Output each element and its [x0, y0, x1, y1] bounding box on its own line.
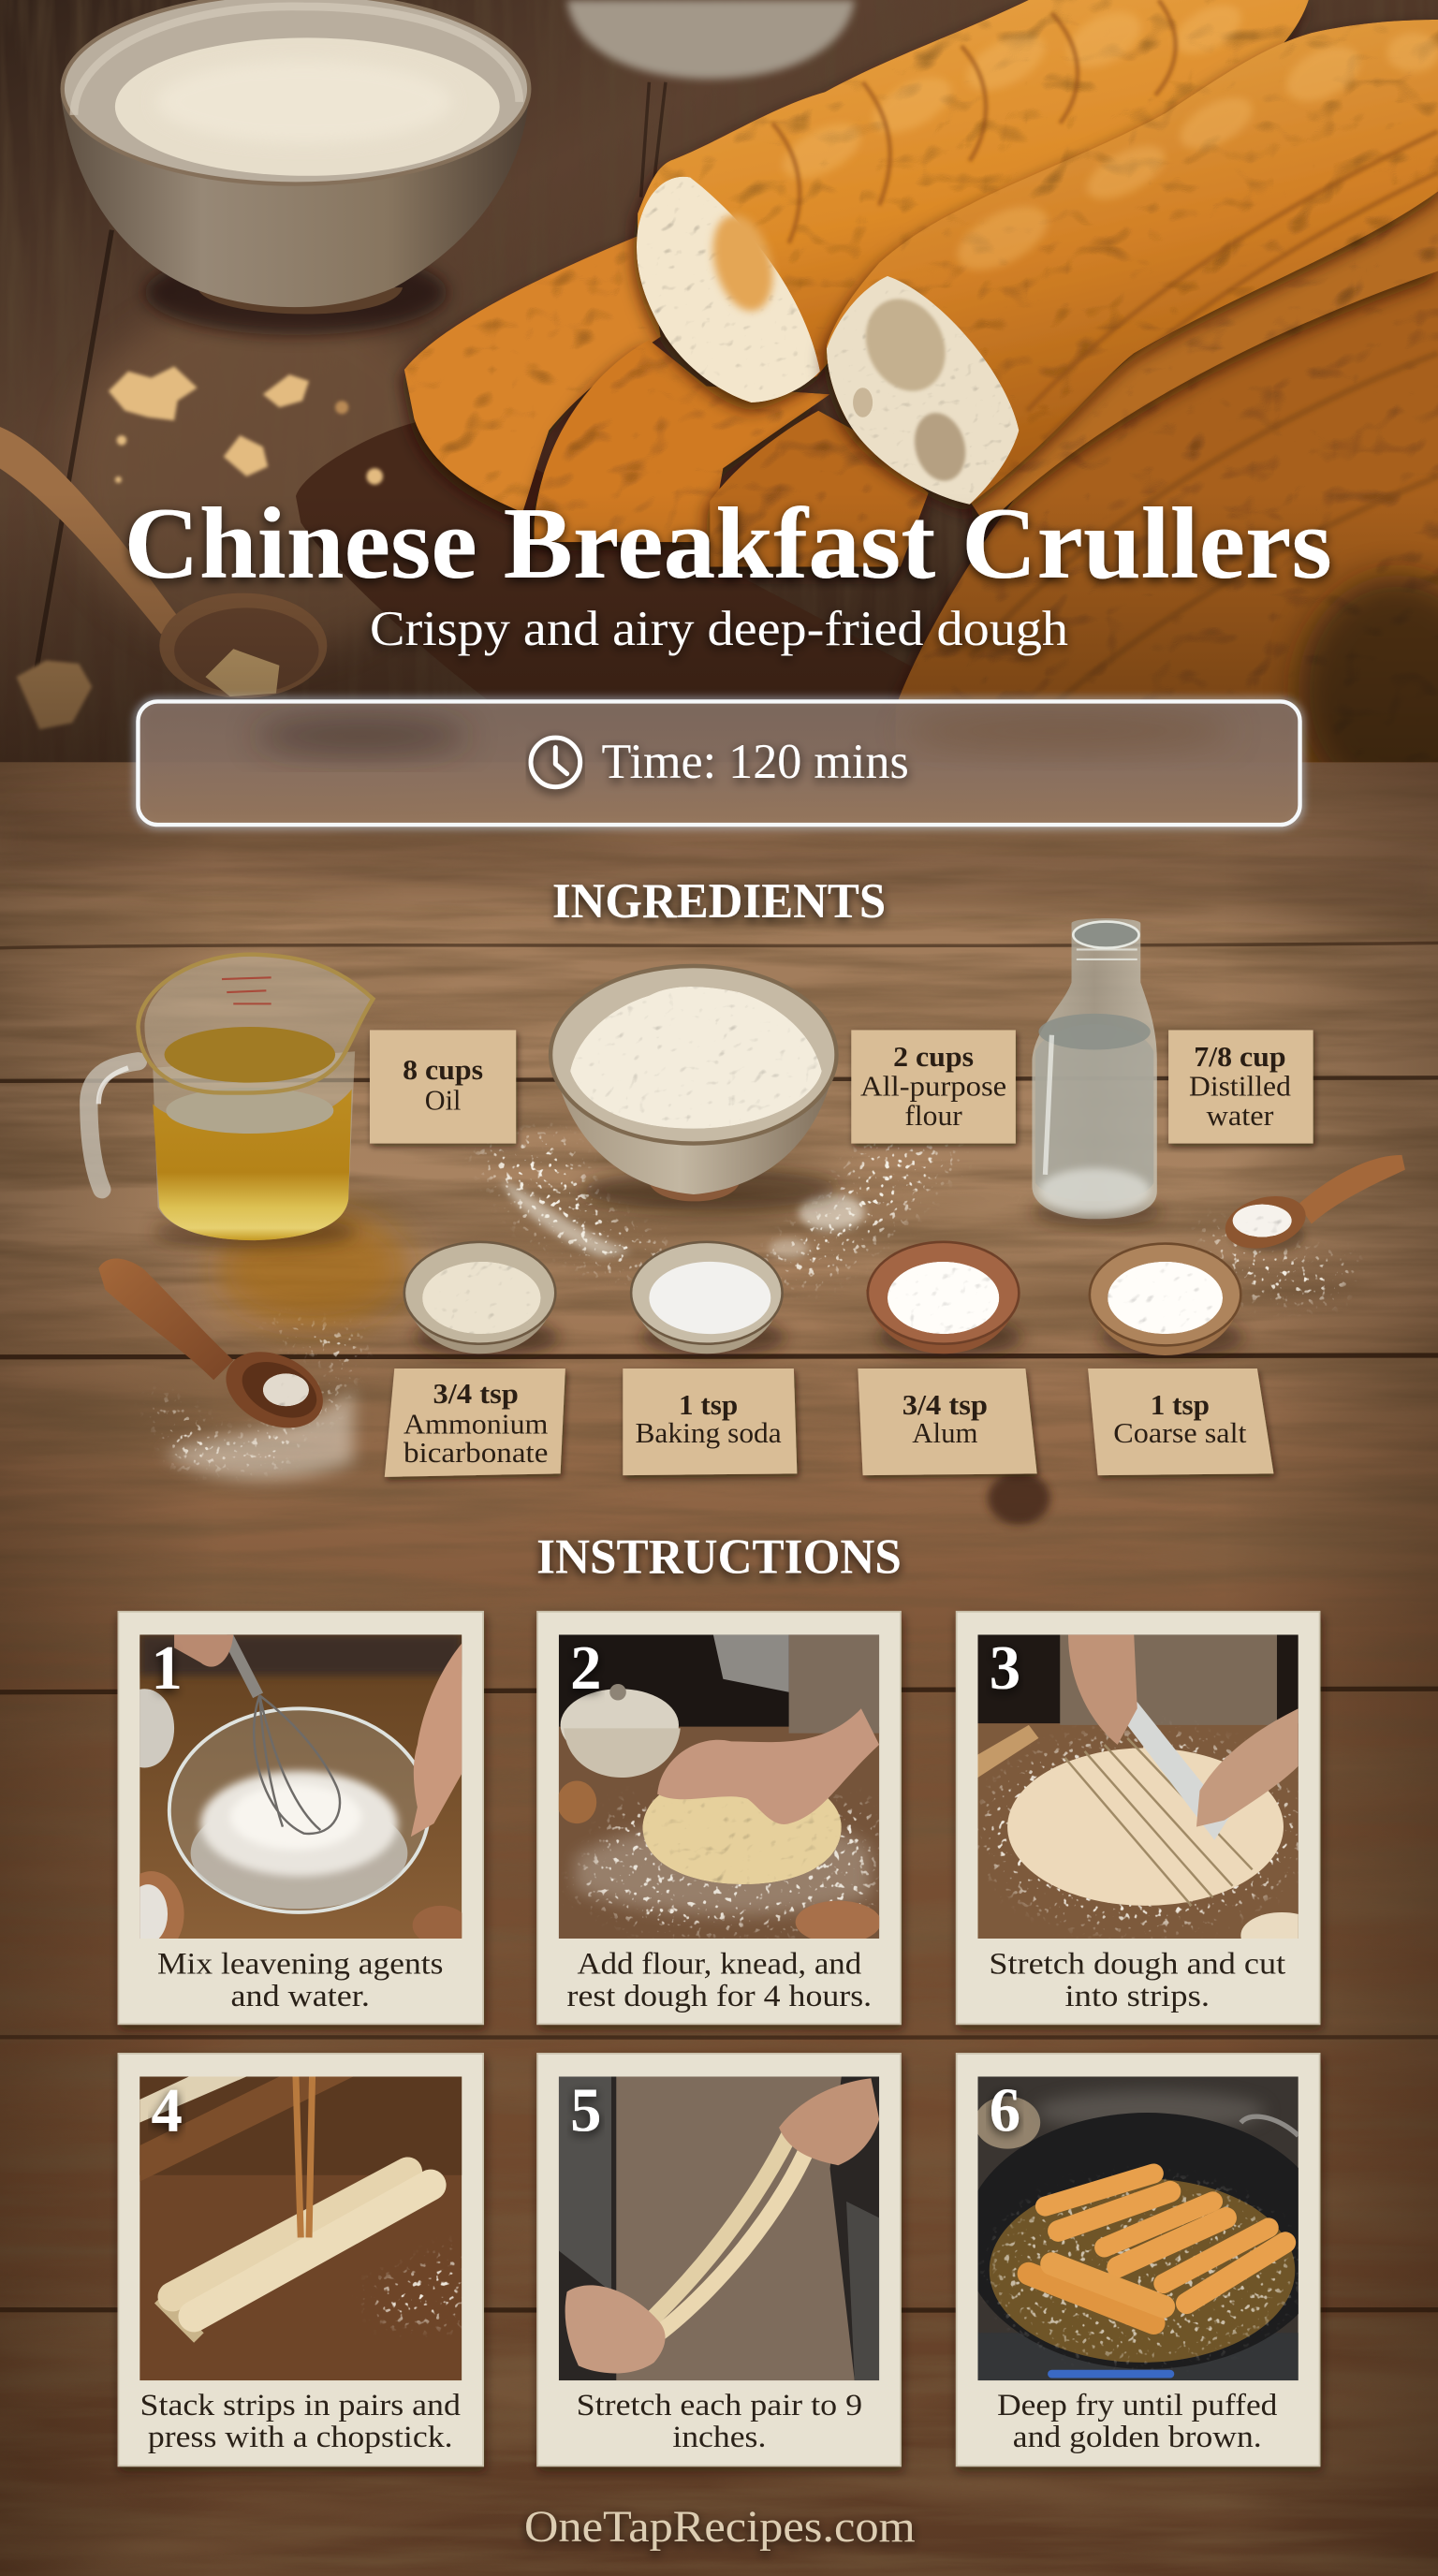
caption: Add flour, knead, and	[578, 1948, 861, 1982]
cup of soy milk	[61, 0, 531, 335]
label: oil: Oil	[425, 1085, 461, 1117]
time panel	[138, 701, 1300, 825]
caption: Mix leavening agents	[157, 1948, 443, 1982]
wood table background	[0, 762, 1438, 2576]
label: baking soda: Baking soda	[635, 1417, 782, 1449]
distant cup	[567, 0, 855, 79]
label: coarse salt: Coarse salt	[1113, 1417, 1247, 1449]
cruller left	[404, 233, 661, 513]
label: water: 7/8 cup	[1194, 1041, 1286, 1073]
label: flour	[851, 1030, 1016, 1144]
card: step 5	[537, 2054, 901, 2466]
flour bowl	[550, 966, 838, 1209]
heading: instructions: INSTRUCTIONS	[536, 1530, 902, 1585]
step number: 6	[990, 2076, 1020, 2144]
label: coarse salt	[1088, 1368, 1273, 1475]
bowl: baking soda	[631, 1242, 785, 1357]
footer: site name: OneTapRecipes.com	[524, 2503, 916, 2552]
label: water	[1168, 1030, 1313, 1144]
caption: press with a chopstick.	[148, 2421, 453, 2454]
spoon left with powder	[98, 1259, 361, 1480]
photo: kneading dough	[557, 1634, 881, 1943]
label: flour: flour	[904, 1100, 962, 1132]
caption	[140, 2389, 461, 2454]
caption	[567, 1948, 872, 2013]
caption: inches.	[672, 2421, 766, 2454]
label: alum	[858, 1368, 1037, 1475]
caption: Stretch each pair to 9	[577, 2389, 862, 2422]
measuring jug of oil	[89, 955, 373, 1249]
heading: ingredients: INGREDIENTS	[552, 874, 886, 929]
dark wooden tabletop	[0, 0, 1438, 762]
crumbs	[17, 366, 383, 729]
step number: 5	[570, 2076, 601, 2144]
label: oil: 8 cups	[403, 1054, 483, 1086]
bowl: coarse salt	[1090, 1244, 1244, 1357]
card: step 3	[957, 1612, 1323, 2024]
wooden spoon	[0, 424, 327, 698]
step number: 3	[990, 1634, 1020, 1703]
oil glow on table	[217, 1209, 407, 1327]
label: baking soda	[623, 1368, 797, 1475]
caption: Stack strips in pairs and	[140, 2389, 461, 2422]
photo: cutting dough strips	[977, 1634, 1323, 1958]
spoon right with salt	[1199, 1155, 1405, 1298]
photo: stretching dough pair	[559, 2076, 879, 2380]
label: ammonium bicarbonate: Ammonium	[404, 1408, 549, 1440]
photo: deep frying in wok	[963, 2076, 1331, 2380]
water bottle	[1032, 918, 1164, 1225]
label: flour: All-purpose	[860, 1071, 1006, 1103]
label: water: water	[1206, 1100, 1273, 1132]
cruller low	[710, 411, 929, 567]
icon: clock	[531, 738, 580, 787]
caption: Stretch dough and cut	[989, 1948, 1285, 1982]
step number: 2	[570, 1634, 601, 1703]
label: ammonium bicarbonate: bicarbonate	[404, 1437, 548, 1469]
label: alum: Alum	[912, 1417, 978, 1449]
card: step 4	[118, 2054, 483, 2466]
caption: into strips.	[1065, 1980, 1210, 2013]
title: Chinese Breakfast Crullers	[125, 487, 1332, 600]
lower darkening	[0, 493, 1438, 762]
lower dim cruller	[896, 255, 1438, 772]
card: step 2	[537, 1612, 901, 2024]
label: oil	[370, 1030, 516, 1144]
cruller back band	[970, 189, 1438, 526]
time label: Time: 120 mins	[601, 735, 909, 789]
caption	[997, 2389, 1277, 2454]
label: flour: 2 cups	[893, 1041, 974, 1073]
cutting board	[296, 423, 906, 699]
caption	[989, 1948, 1285, 2013]
caption: Deep fry until puffed	[997, 2389, 1277, 2422]
bowl: alum	[866, 1242, 1022, 1357]
caption	[157, 1948, 443, 2013]
panel: ingredients	[89, 918, 1405, 1480]
upper cruller A	[637, 0, 1310, 402]
bowl: ammonium bicarbonate	[404, 1242, 559, 1357]
photo: pressing strips with chopstick	[139, 2076, 462, 2380]
caption: rest dough for 4 hours.	[567, 1980, 872, 2013]
label: ammonium bicarbonate: 3/4 tsp	[433, 1378, 519, 1410]
label: baking soda: 1 tsp	[679, 1389, 738, 1421]
broken end A	[637, 177, 820, 402]
subtitle: Crispy and airy deep-fried dough	[370, 602, 1068, 656]
caption: and golden brown.	[1013, 2421, 1262, 2454]
caption	[577, 2389, 862, 2454]
broken end B	[827, 276, 1019, 505]
hero photo: crullers and soy milk	[0, 0, 1438, 805]
label: coarse salt: 1 tsp	[1151, 1389, 1210, 1421]
step number: 1	[151, 1634, 183, 1703]
photo: whisking in glass bowl	[115, 1632, 468, 1956]
caption: and water.	[231, 1980, 370, 2013]
label: ammonium bicarbonate	[385, 1368, 565, 1477]
label: water: Distilled	[1189, 1071, 1291, 1103]
flour dust	[477, 1134, 961, 1281]
card: step 1	[115, 1612, 483, 2024]
step number: 4	[151, 2076, 183, 2144]
label: alum: 3/4 tsp	[902, 1389, 988, 1421]
upper cruller B	[827, 20, 1438, 505]
card: step 6	[957, 2054, 1331, 2466]
cruller middle	[535, 340, 829, 542]
